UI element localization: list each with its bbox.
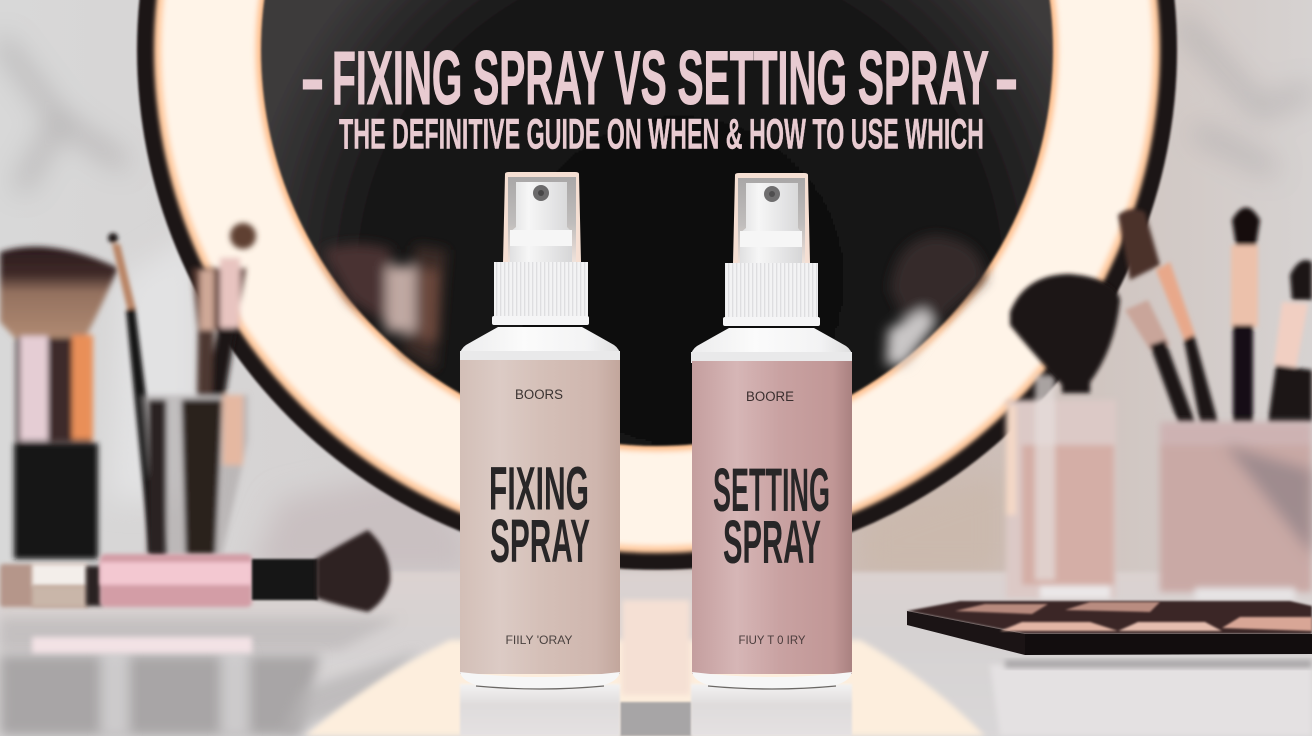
bottle: fixing spray: FIXING: [489, 454, 589, 522]
palette top: [907, 601, 1312, 634]
fine print: FIILY 'ORAY: [506, 633, 572, 647]
palette pans: [1000, 622, 1118, 631]
light reflection on table: [305, 640, 985, 736]
base: [692, 672, 852, 689]
pot: [1160, 422, 1312, 601]
product name: [489, 454, 590, 575]
mirror frame: [137, 0, 1177, 570]
title block: [300, 36, 1018, 158]
clear cap: [503, 172, 581, 262]
title: -: [994, 36, 1018, 121]
bottle: fixing spray: SPRAY: [490, 507, 590, 575]
brand: BOORS: [515, 387, 563, 402]
left glass cup with brushes: [140, 223, 256, 555]
mirror centre: [261, 0, 1053, 446]
glowing ring: [154, 0, 1160, 553]
ring inner glow: [256, 0, 1058, 451]
pump: [740, 183, 802, 263]
bottle reflections: [460, 684, 852, 736]
ring light mirror: [137, 0, 1177, 570]
clear cap: [733, 173, 810, 263]
brand: BOORE: [746, 389, 794, 404]
ribbed collar: [494, 262, 588, 317]
brush reflection: [32, 637, 252, 653]
bottle: setting spray: [691, 173, 852, 689]
body label: [460, 360, 620, 674]
bottle: setting spray: SETTING: [713, 456, 830, 524]
product name: SPRAY: [723, 508, 821, 576]
left thin brush: [108, 233, 166, 555]
left brush holder with fan brush: [0, 247, 118, 559]
body label: [692, 361, 852, 674]
ribbed collar: [725, 263, 818, 318]
brushes in pot: [1118, 209, 1160, 280]
title: [300, 36, 1018, 121]
blurred brushes reflected in mirror: [322, 235, 985, 370]
pump: [510, 182, 572, 262]
right jar: [1006, 375, 1116, 598]
title: -: [300, 36, 324, 121]
marble table: [0, 572, 1312, 736]
fine print: FIUY T 0 IRY: [738, 633, 806, 647]
eyeshadow palette: [907, 601, 1312, 655]
palette side: [907, 611, 1025, 655]
table brush: [0, 530, 390, 653]
black brush head: [1010, 274, 1120, 393]
table shadows and veins: [0, 618, 400, 650]
bottle: fixing spray: [460, 172, 620, 689]
right brush pot: [1118, 208, 1312, 601]
palette front: [1025, 634, 1312, 655]
product name: [713, 456, 830, 576]
shoulder: [691, 328, 852, 363]
base: [460, 672, 620, 689]
shoulder: [460, 327, 620, 362]
